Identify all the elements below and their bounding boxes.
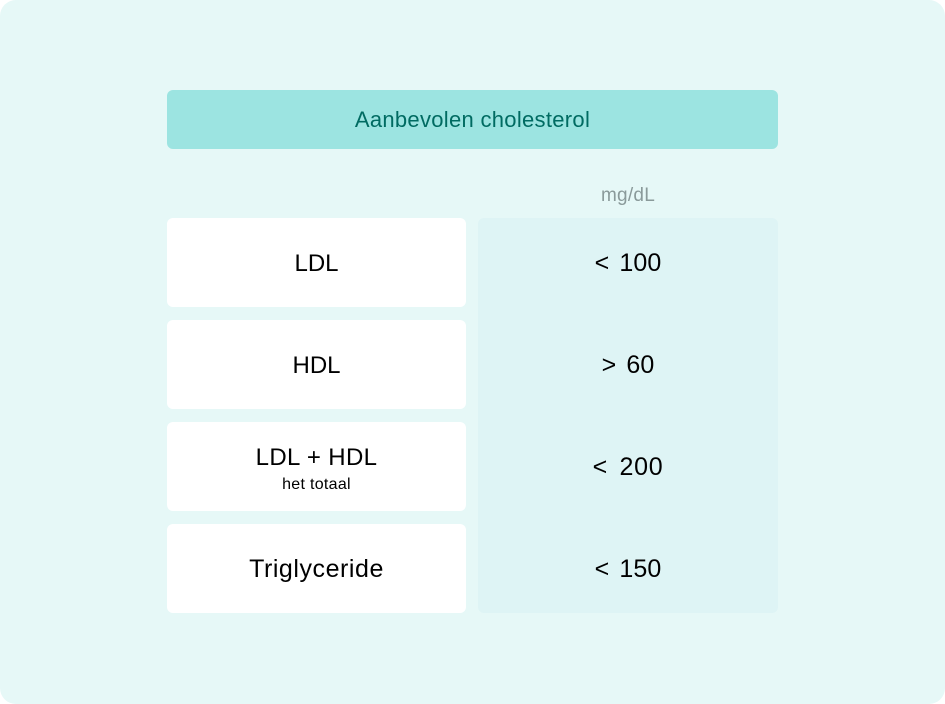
row label: HDL: [167, 320, 466, 409]
row label: LDL + HDL, het totaal: [167, 422, 466, 511]
row label: HDL: HDL: [292, 352, 340, 378]
label text: LDL + HDL: LDL + HDL: [256, 444, 377, 471]
row label: Triglyceride: Triglyceride: [249, 554, 384, 582]
value: less than 150: < 150: [595, 555, 661, 583]
panel: values column: [478, 218, 778, 613]
label subtext: het totaal: het totaal: [282, 476, 351, 493]
heading: Aanbevolen cholesterol: [167, 90, 778, 149]
value: greater than 60: > 60: [602, 351, 654, 379]
value: less than 100: < 100: [595, 249, 661, 277]
value: less than 200: < 200: [593, 453, 663, 481]
heading: Aanbevolen cholesterol: Aanbevolen cholesterol: [355, 106, 590, 132]
row label: LDL: [167, 218, 466, 307]
row label: Triglyceride: [167, 524, 466, 613]
row label: LDL: LDL: [294, 250, 339, 276]
column label: mg/dL: mg/dL: [601, 185, 655, 206]
